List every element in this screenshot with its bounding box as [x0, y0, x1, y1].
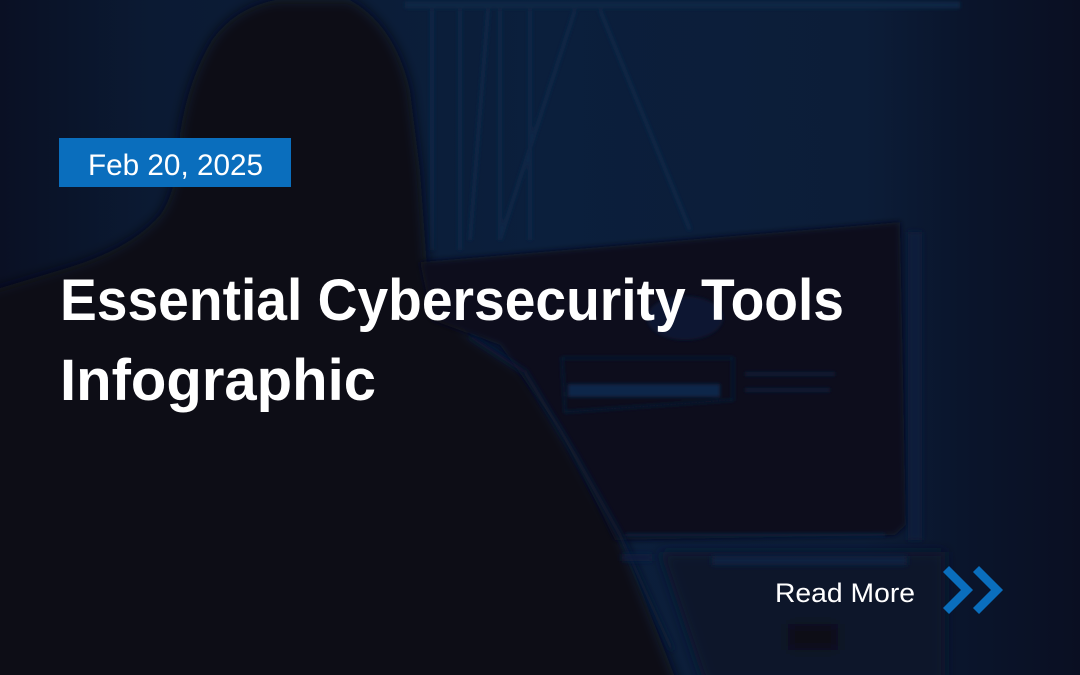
monitor screen details — [562, 296, 885, 535]
date badge: Feb 20, 2025 — [88, 149, 263, 182]
date badge — [59, 138, 291, 187]
shoulder rim light — [471, 337, 634, 569]
monitor — [420, 222, 906, 540]
keyboard and monitor edge highlights — [622, 232, 922, 565]
title — [60, 268, 844, 413]
icon: double chevron arrow — [946, 569, 997, 611]
title: Infographic — [60, 348, 376, 413]
title: Essential Cybersecurity Tools — [60, 268, 844, 333]
person silhouette — [0, 0, 680, 675]
desk and keyboard glow — [660, 552, 945, 675]
read more link: Read More — [775, 578, 915, 608]
